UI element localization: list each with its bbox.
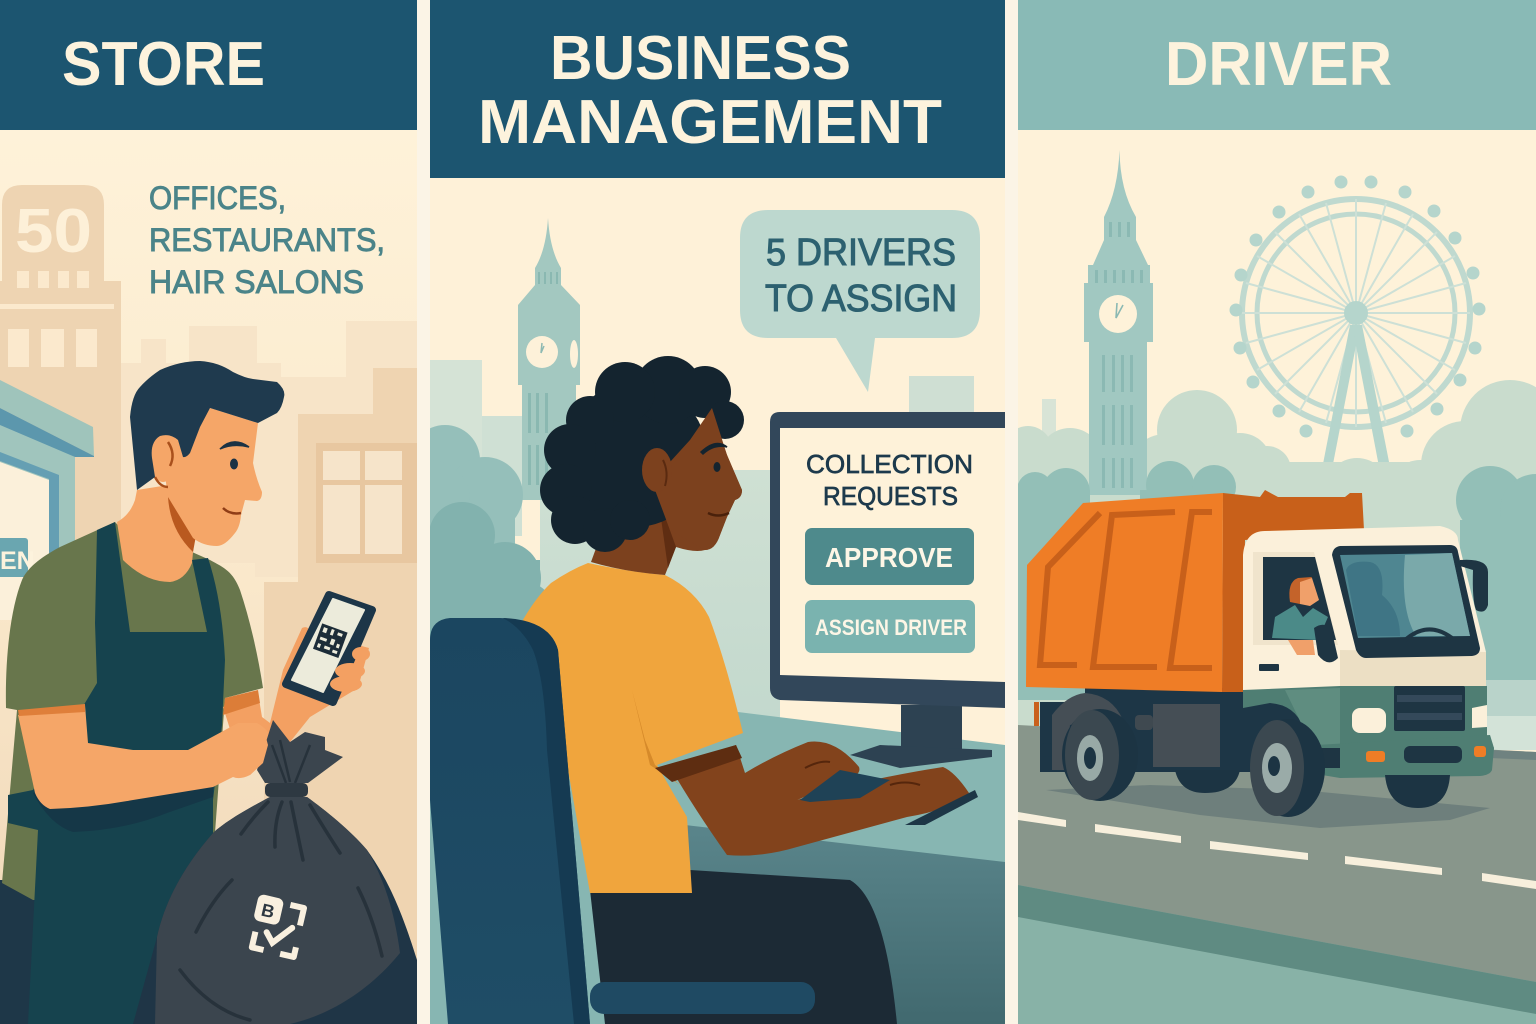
store worker [0, 361, 369, 1024]
dark tree line [1017, 461, 1536, 750]
light tree line [1004, 380, 1536, 730]
store types text: HAIR SALONS [149, 264, 364, 300]
header: store [0, 0, 417, 130]
compactor body [1222, 490, 1364, 692]
big ben [1084, 150, 1153, 495]
head and face [160, 408, 262, 546]
header: driver: DRIVER [1165, 30, 1392, 99]
arm and hands [655, 742, 978, 856]
eye brow mouth [230, 458, 238, 470]
chair [430, 618, 815, 1024]
assign driver button [805, 600, 975, 653]
speech bubble: 5 DRIVERS [766, 232, 956, 274]
screen text: COLLECTION [806, 449, 973, 479]
desk [430, 712, 1005, 1024]
bag logo [247, 894, 306, 957]
facial features [714, 462, 720, 472]
middle wheel [1175, 770, 1240, 793]
header: business management: BUSINESS [550, 24, 851, 93]
speech bubble: TO ASSIGN [765, 278, 957, 320]
road [1018, 725, 1536, 1024]
header: business management: MANAGEMENT [478, 88, 942, 157]
side mirror [1460, 560, 1488, 612]
trousers [0, 880, 34, 1024]
speech bubble [740, 210, 980, 392]
garbage bag with logo [133, 720, 417, 1024]
computer monitor [770, 412, 1005, 768]
shop front with open sign [0, 380, 94, 620]
bag logo: B [259, 900, 277, 922]
panel: driver [1004, 0, 1536, 1024]
phone with QR code [286, 595, 372, 702]
curly hair [540, 356, 744, 552]
panel: store [0, 0, 417, 1024]
store types text: OFFICES, [149, 180, 286, 216]
cab lower green [1243, 686, 1494, 776]
cab cream [1243, 526, 1486, 690]
near arm [18, 705, 273, 809]
approve button [805, 528, 974, 585]
front wheels [1250, 719, 1450, 817]
far arm [223, 627, 369, 745]
assign driver button: ASSIGN DRIVER [815, 615, 967, 640]
panel: business management [390, 0, 1005, 1024]
screen text [807, 454, 972, 510]
rear wheel [1062, 709, 1138, 801]
header: store: STORE [62, 30, 265, 99]
building with number 50 [0, 185, 121, 540]
big ben background [518, 218, 580, 500]
face front over hair [655, 408, 742, 550]
header: driver [1018, 0, 1536, 130]
lane markings [1018, 812, 1536, 889]
trousers [590, 870, 897, 1024]
screen text: REQUESTS [823, 481, 958, 511]
garbage truck [1026, 490, 1494, 817]
distant skyline [121, 321, 417, 430]
shirt [520, 563, 743, 893]
hair [130, 361, 284, 490]
hand over bag [234, 740, 268, 775]
background wall [540, 470, 780, 740]
side window and driver [1259, 557, 1338, 671]
approve button: APPROVE [825, 542, 953, 573]
grille and lights [1394, 686, 1465, 731]
shop front with open sign: EN [0, 547, 35, 575]
store types text [150, 186, 383, 294]
apron [8, 522, 225, 1024]
windshield [1332, 545, 1480, 658]
ferris wheel [1230, 176, 1486, 472]
torso and shirt [2, 522, 263, 900]
trees [430, 425, 523, 544]
chassis [1040, 688, 1320, 772]
building with number 50: 50 [15, 197, 92, 266]
neck and face [591, 414, 742, 575]
right building with window [264, 368, 417, 942]
neck [117, 485, 194, 582]
store types text: RESTAURANTS, [149, 222, 385, 258]
header: business management [430, 0, 1005, 178]
fuel tank and fenders [1153, 704, 1220, 767]
